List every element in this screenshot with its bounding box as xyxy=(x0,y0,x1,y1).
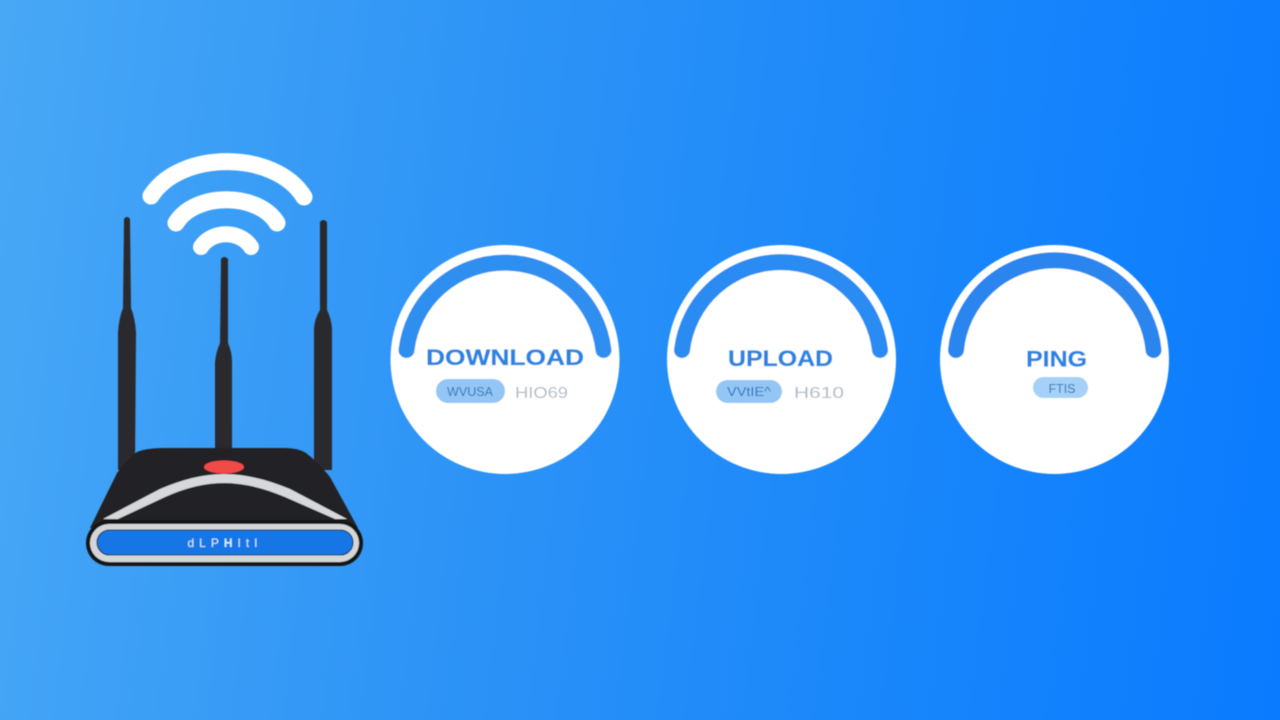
upload gauge arc xyxy=(682,262,880,350)
front silver ring xyxy=(90,524,359,562)
ping unit text: FTIS xyxy=(1048,381,1076,396)
upload dial circle xyxy=(667,245,896,474)
front blue panel xyxy=(97,530,353,555)
front panel label: dLPHItI xyxy=(187,536,263,550)
wifi inner arc xyxy=(201,234,251,247)
download gauge arc xyxy=(406,263,604,350)
right antenna xyxy=(314,220,332,470)
download unit text: WVUSA xyxy=(447,384,493,399)
download dial circle xyxy=(390,245,620,474)
download heading: DOWNLOAD xyxy=(426,345,584,370)
panel: ping xyxy=(940,245,1169,474)
panel: upload xyxy=(667,245,896,474)
download value: HIO69 xyxy=(515,385,568,402)
router front base xyxy=(86,520,363,566)
ping heading: PING xyxy=(1026,346,1087,372)
icon: wifi signal xyxy=(151,162,304,247)
red indicator xyxy=(204,460,244,474)
upload unit text: VVtIE^ xyxy=(727,384,772,399)
ping unit pill xyxy=(1033,377,1088,398)
upload value: H610 xyxy=(794,385,844,402)
ping gauge arc xyxy=(956,260,1154,350)
left antenna xyxy=(118,217,136,470)
silver arc xyxy=(103,474,347,519)
wifi outer arc xyxy=(151,162,304,197)
download unit pill xyxy=(436,379,505,403)
upload heading: UPLOAD xyxy=(728,346,833,371)
panel: download xyxy=(390,245,620,474)
middle antenna xyxy=(215,257,232,460)
ping dial circle xyxy=(940,245,1169,474)
router body xyxy=(90,448,358,528)
wifi middle arc xyxy=(176,200,277,223)
upload unit pill xyxy=(716,380,782,403)
icon: router xyxy=(86,217,363,566)
